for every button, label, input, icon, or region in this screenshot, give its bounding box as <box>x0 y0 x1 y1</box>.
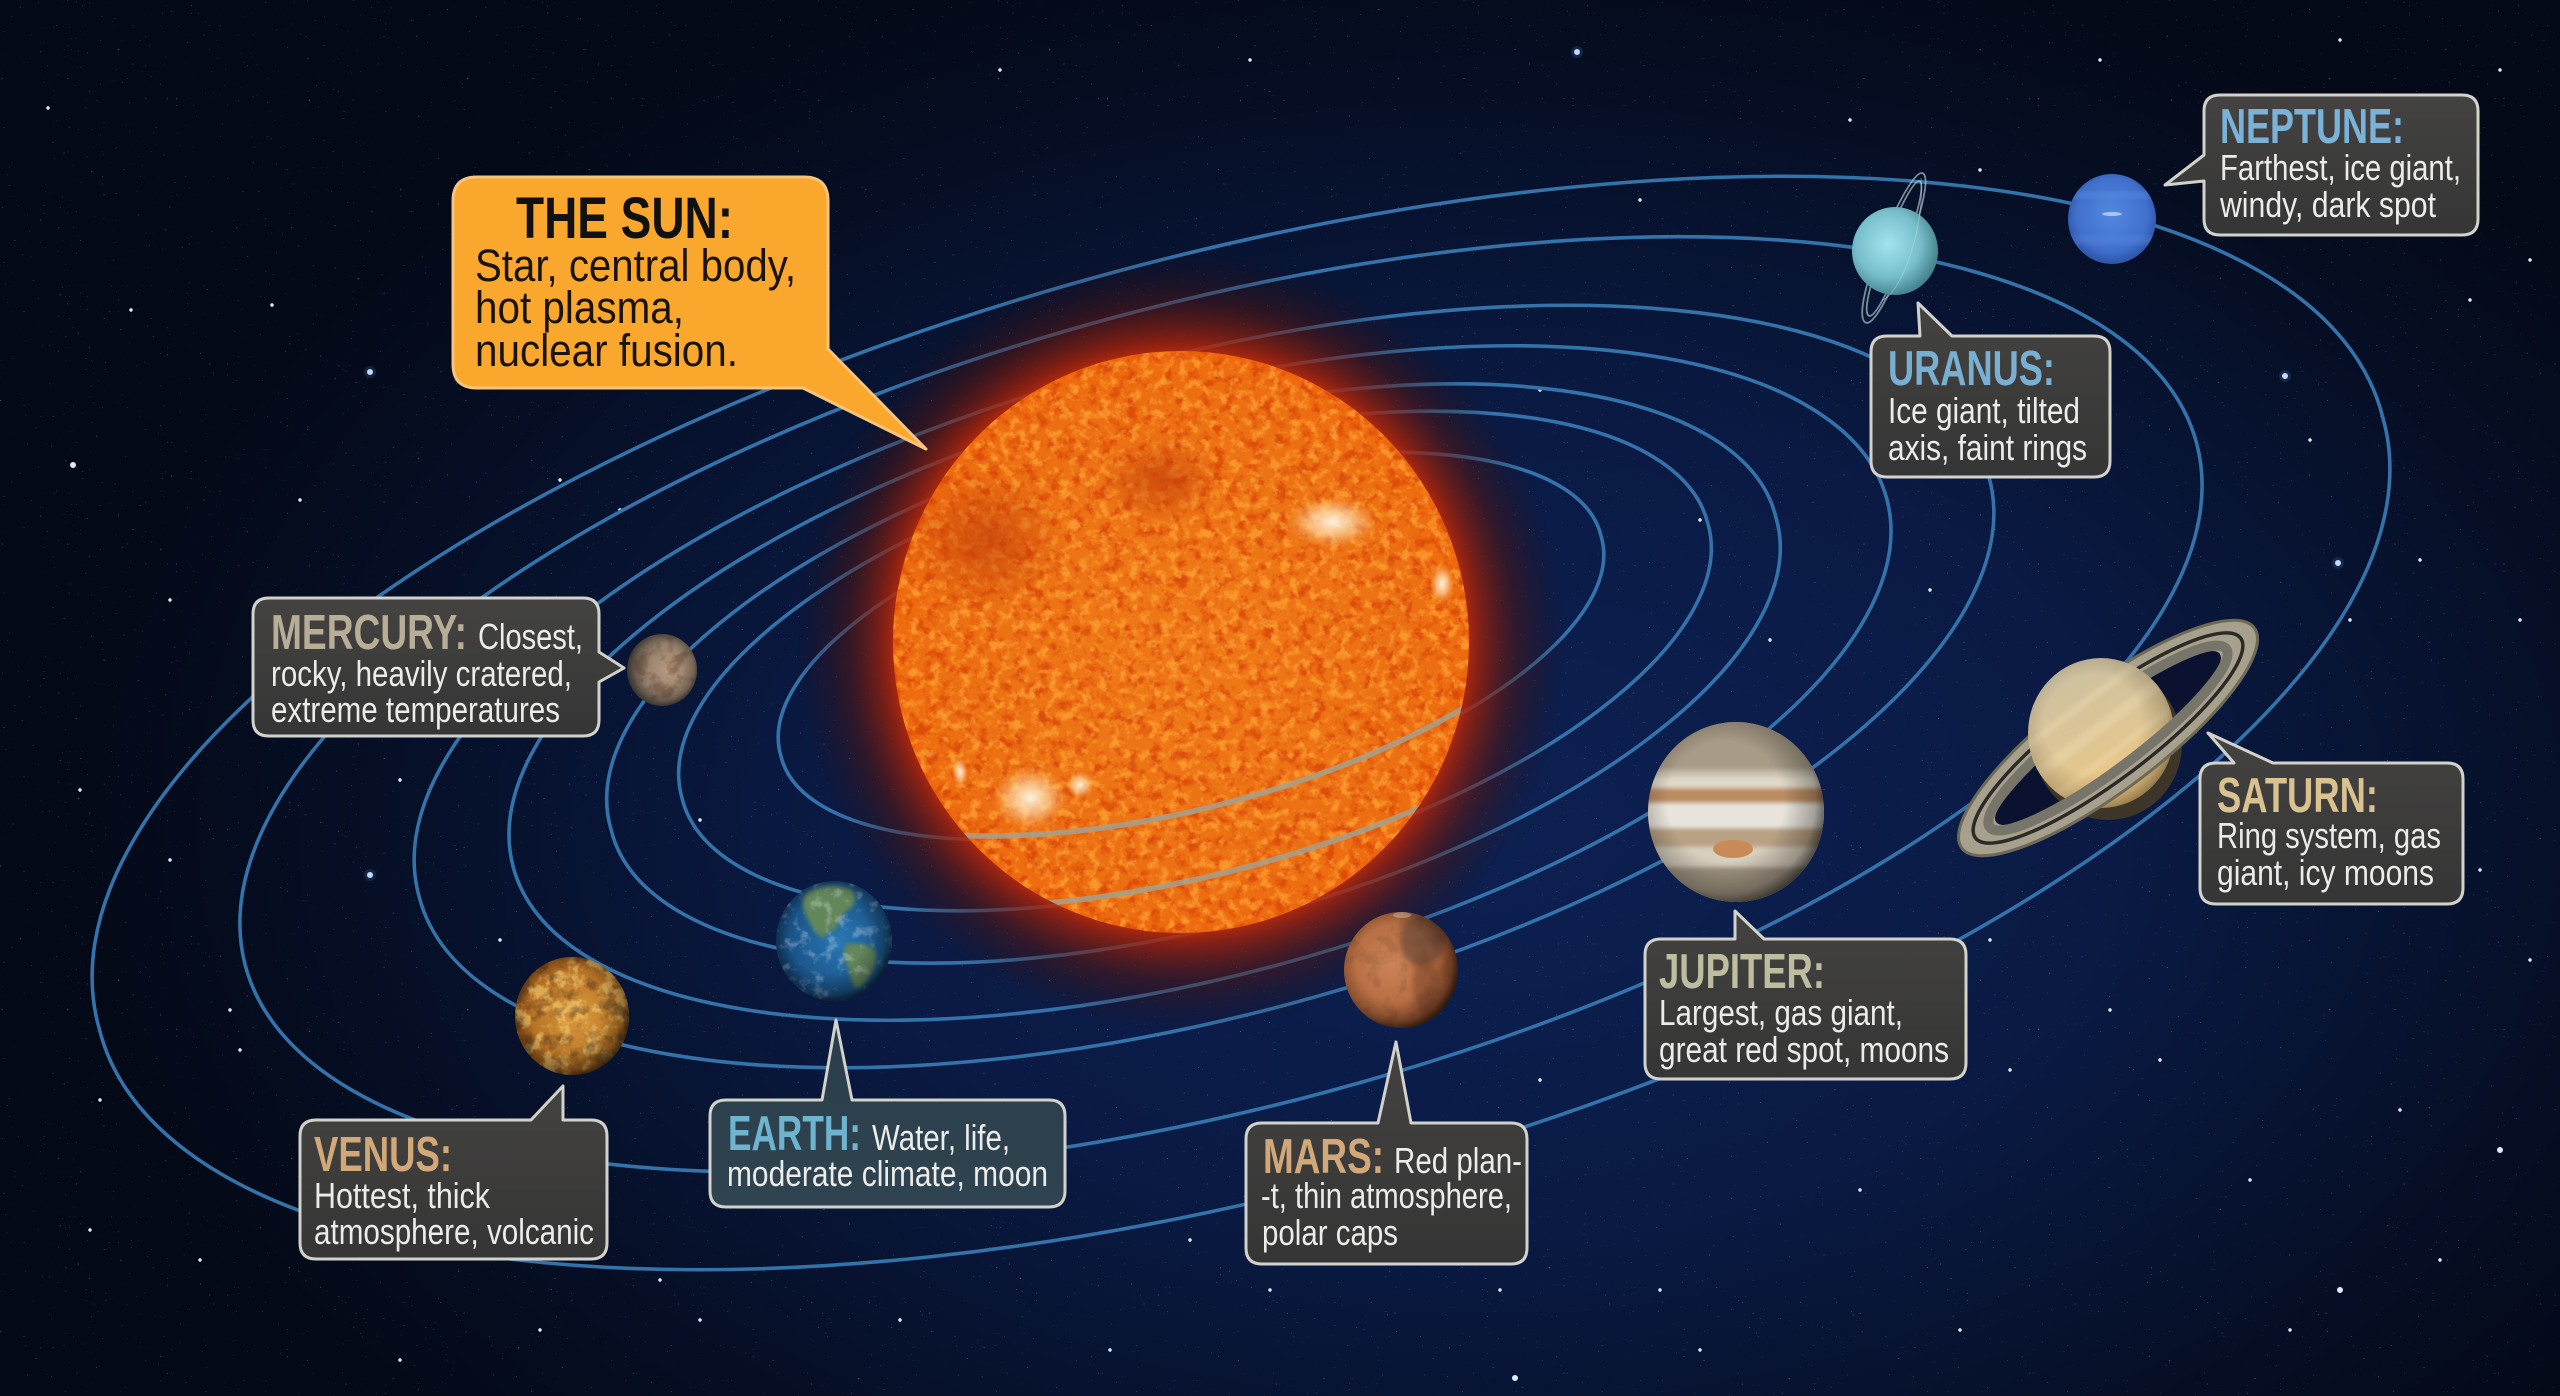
callout: Uranus <box>1871 303 2110 477</box>
callout: the sun <box>453 177 926 449</box>
box <box>1246 1042 1527 1264</box>
sun <box>803 258 1560 1026</box>
heading: MERCURY: <box>271 606 467 660</box>
callout: Mars: -t, thin atmosphere, <box>1261 1175 1512 1216</box>
dark region <box>1400 914 1444 966</box>
dark sunspot areas <box>916 481 1054 596</box>
bright cloud <box>2102 212 2122 216</box>
callout: Mercury: rocky, heavily cratered, <box>271 653 572 694</box>
body: Ring system, gas <box>2217 815 2441 856</box>
continents <box>803 886 855 938</box>
body: hot plasma, <box>475 282 684 333</box>
polar cap <box>1393 912 1411 918</box>
callout: Mars: polar caps <box>1262 1212 1398 1253</box>
globe <box>2028 658 2174 808</box>
orbit arcs in front of the sun <box>964 706 1462 839</box>
body: Hottest, thick <box>314 1175 491 1216</box>
heading: MARS: <box>1263 1130 1384 1184</box>
planet: Mercury <box>627 634 697 706</box>
orbits <box>92 176 2390 1270</box>
body: Water, life, <box>872 1117 1010 1158</box>
box <box>300 1086 607 1259</box>
planet: Neptune <box>2066 174 2158 264</box>
callout: Jupiter: great red spot, moons <box>1659 1029 1949 1070</box>
body: Star, central body, <box>475 240 796 291</box>
box <box>710 1020 1065 1207</box>
ring front <box>1960 628 2259 858</box>
callout: Uranus: axis, faint rings <box>1888 427 2087 468</box>
box <box>2165 95 2478 235</box>
callout: Mercury: extreme temperatures <box>271 689 560 730</box>
heading: THE SUN: <box>516 186 733 251</box>
sun glow <box>796 252 1566 1032</box>
body: Closest, <box>478 616 583 657</box>
callout: Venus: atmosphere, volcanic <box>314 1211 594 1252</box>
callout: Mars <box>1246 1042 1527 1264</box>
sun surface <box>893 351 1469 933</box>
planet: Uranus <box>1852 173 1938 323</box>
callout: Earth: moderate climate, moon <box>727 1153 1048 1194</box>
heading: SATURN: <box>2217 769 2378 823</box>
bright flares <box>1289 498 1375 546</box>
body: Largest, gas giant, <box>1659 992 1903 1033</box>
planet: Mars <box>1344 912 1458 1028</box>
body: Ice giant, tilted <box>1888 390 2080 431</box>
callout: Saturn: giant, icy moons <box>2217 852 2434 893</box>
great red spot <box>1713 840 1753 858</box>
callout: Jupiter <box>1645 911 1966 1079</box>
heading: NEPTUNE: <box>2220 100 2404 154</box>
body: Red plan- <box>1394 1140 1522 1181</box>
planet: Saturn <box>1957 618 2259 858</box>
callout: Neptune <box>2165 95 2478 235</box>
box <box>253 598 624 736</box>
faint rings <box>1862 173 1926 323</box>
planet: Jupiter <box>1648 722 1824 902</box>
ring and shadow gap <box>1931 586 2285 890</box>
box <box>1645 911 1966 1079</box>
cloud bands <box>1648 722 1824 902</box>
heading: EARTH: <box>728 1107 861 1161</box>
callout: Venus <box>300 1086 607 1259</box>
body: Farthest, ice giant, <box>2220 147 2461 188</box>
heading: VENUS: <box>314 1128 452 1182</box>
callout: Mercury <box>253 598 624 736</box>
heading: URANUS: <box>1888 342 2055 396</box>
callout: Saturn <box>2200 733 2463 904</box>
body <box>475 240 796 376</box>
planet: Venus <box>515 957 629 1075</box>
box <box>453 177 926 449</box>
body: nuclear fusion. <box>475 325 738 376</box>
box <box>1871 303 2110 477</box>
heading: JUPITER: <box>1659 945 1825 999</box>
callout: Earth <box>710 1020 1065 1207</box>
box <box>2200 733 2463 904</box>
callout: Neptune: windy, dark spot <box>2219 184 2436 225</box>
planet: Earth <box>776 881 892 1001</box>
